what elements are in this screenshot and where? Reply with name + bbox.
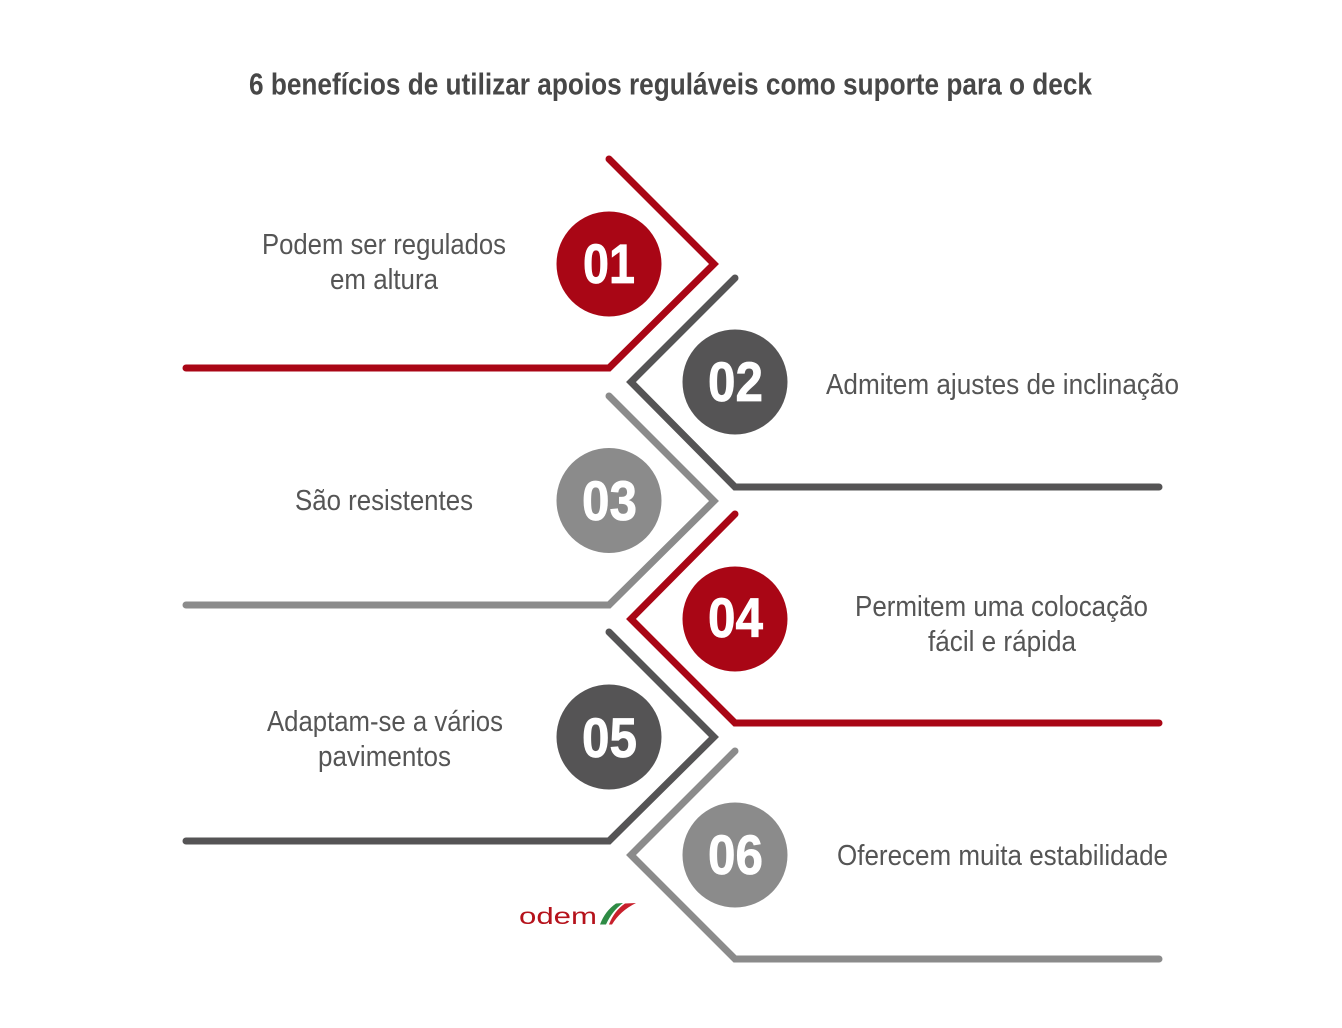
step 03: [186, 396, 714, 605]
badge 01: 01: [583, 232, 635, 295]
badge 06: [682, 802, 788, 908]
chevron line 03: [186, 396, 714, 605]
text 02: Admitem ajustes de inclinação: [826, 369, 1179, 401]
badge 03: [556, 448, 662, 553]
step 01: [186, 159, 714, 368]
text 06: Oferecem muita estabilidade: [837, 840, 1168, 872]
text 03: São resistentes: [295, 485, 473, 517]
chevron line 02: [631, 278, 1159, 487]
badge 02: [682, 330, 788, 434]
badge 06: 06: [708, 823, 763, 886]
text 05: pavimentos: [318, 741, 451, 773]
step 02: [631, 278, 1179, 487]
text 01: Podem ser regulados: [262, 229, 506, 261]
badge 01: [556, 212, 662, 316]
text 04: [855, 591, 1148, 658]
text 04: fácil e rápida: [928, 626, 1077, 658]
logo: odem: odem: [519, 903, 597, 929]
text 01: em altura: [330, 264, 439, 296]
badge 04: 04: [708, 586, 763, 649]
text 01: [262, 229, 506, 296]
chevron line 01: [186, 159, 714, 368]
step 04: [631, 514, 1159, 723]
logo: odem: [519, 903, 636, 929]
step 05: [186, 632, 714, 841]
badge 03: 03: [582, 469, 637, 532]
text 05: [267, 706, 503, 773]
chevron line 06: [631, 751, 1159, 959]
badge 05: 05: [582, 706, 637, 769]
text 04: Permitem uma colocação: [855, 591, 1148, 623]
step 06: [631, 751, 1168, 959]
logo stripes: [600, 903, 636, 924]
badge 05: [556, 684, 662, 790]
title: 6 benefícios de utilizar apoios reguláveis como suporte para o deck: [249, 66, 1093, 102]
chevron line 05: [186, 632, 714, 841]
text 05: Adaptam-se a vários: [267, 706, 503, 738]
badge 02: 02: [708, 350, 763, 413]
badge 04: [682, 566, 788, 672]
chevron line 04: [631, 514, 1159, 723]
